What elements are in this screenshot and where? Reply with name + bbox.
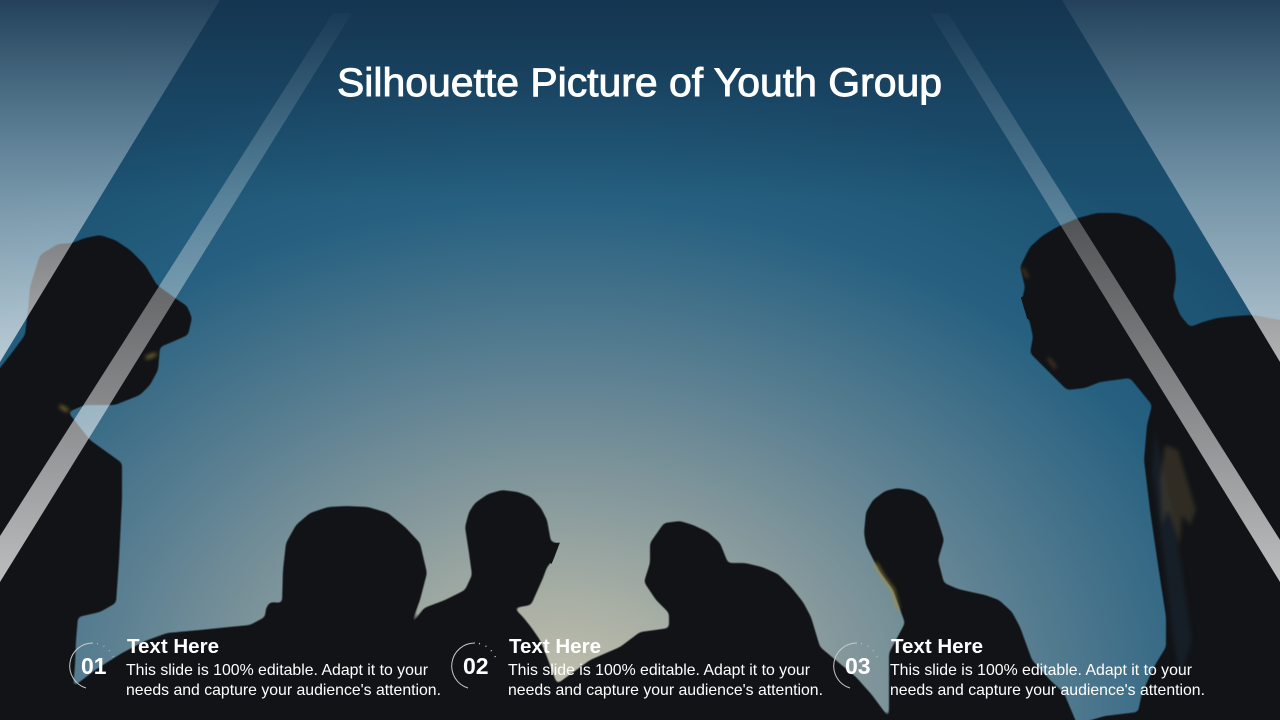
icon: progress ring 01 — [70, 643, 114, 688]
item 01 — [70, 636, 441, 699]
sunlit edges on hair and faces — [60, 354, 898, 610]
item 02 — [452, 636, 823, 699]
body text 03: This slide is 100% editable. Adapt it to your — [890, 662, 1193, 679]
glasses of the right person — [1022, 292, 1036, 322]
icon: progress ring 02 — [452, 643, 496, 688]
body text 02 — [508, 662, 823, 699]
warm edges on right person's hair and chin — [1022, 268, 1056, 368]
icon: progress ring 03 — [834, 643, 878, 688]
number 03: 03 — [845, 653, 871, 679]
heading 01: Text Here — [127, 636, 219, 658]
heading 03: Text Here — [891, 636, 983, 658]
title: Silhouette Picture of Youth Group — [337, 61, 942, 105]
body text 01: needs and capture your audience's attention. — [126, 682, 441, 699]
silhouettes of the youth group — [0, 213, 1280, 720]
body text 01 — [126, 662, 441, 699]
left diagonal translucent strip — [0, 13, 352, 582]
right diagonal translucent strip — [930, 13, 1280, 582]
item 03 — [834, 636, 1205, 699]
body text 02: needs and capture your audience's attention. — [508, 682, 823, 699]
body text 03 — [890, 662, 1205, 699]
left corner translucent triangle — [0, 0, 220, 362]
body text 02: This slide is 100% editable. Adapt it to your — [508, 662, 811, 679]
number 01: 01 — [81, 653, 107, 679]
body text 03: needs and capture your audience's attention. — [890, 682, 1205, 699]
right corner translucent triangle — [1062, 0, 1280, 362]
body text 01: This slide is 100% editable. Adapt it to your — [126, 662, 429, 679]
dark blue shirt tone on right person — [1152, 430, 1192, 680]
blonde hair strands of right person — [1160, 445, 1196, 545]
glasses of the middle person — [545, 544, 558, 562]
number 02: 02 — [463, 653, 489, 679]
heading 02: Text Here — [509, 636, 601, 658]
